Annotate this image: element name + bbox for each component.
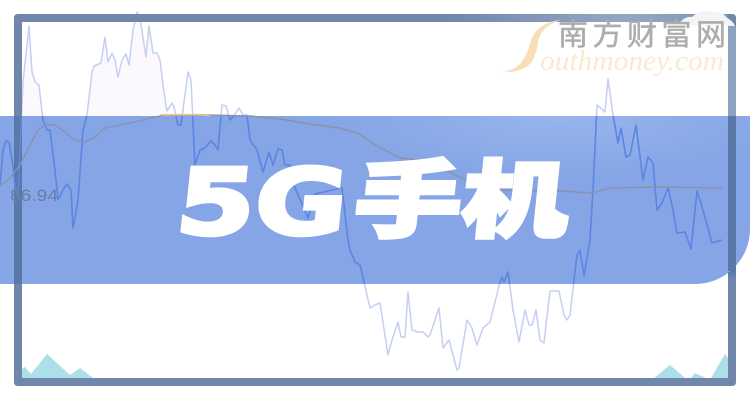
moving average highlight	[160, 114, 210, 116]
title	[172, 149, 574, 256]
watermark logo	[503, 11, 735, 77]
area fill under the price line	[23, 12, 168, 116]
cloud	[678, 11, 735, 26]
frame seen through the band	[14, 116, 736, 284]
title: 手机	[350, 154, 574, 248]
teal mountain chart, bottom left	[22, 354, 93, 378]
Chinese brand name: 南方财富网	[558, 19, 726, 52]
blue title band	[0, 116, 750, 284]
teal mountain chart, bottom right	[654, 354, 728, 378]
title: 5G	[172, 149, 353, 256]
axis value label: 86.94	[10, 186, 58, 205]
swoosh S	[503, 20, 561, 72]
price line, section inside the band	[0, 116, 722, 284]
moving average line	[0, 115, 722, 193]
domain: outhmoney.com	[540, 45, 724, 77]
